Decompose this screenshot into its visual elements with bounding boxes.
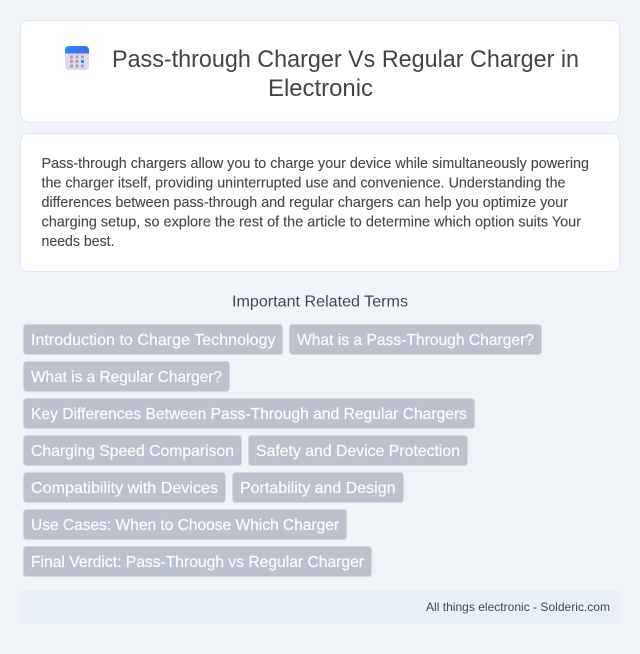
tag: what is a regular charger — [24, 362, 230, 392]
text block: introduction: the charger itself, providing uninterrupted use and convenience. Understanding the — [42, 176, 566, 192]
tag: safety and device protection: Safety and Device Protection — [256, 443, 460, 460]
title — [112, 46, 579, 102]
tag: what is a pass-through charger: What is a Pass-Through Charger? — [297, 332, 534, 349]
title: Electronic — [268, 75, 373, 102]
tag: compatibility with devices: Compatibility with Devices — [31, 480, 218, 497]
panel: title card — [20, 20, 620, 122]
tag: portability and design: Portability and Design — [240, 480, 396, 497]
tag: use cases — [24, 510, 346, 540]
tag: what is a pass-through charger — [290, 324, 542, 354]
text block: introduction: differences between pass-through and regular chargers can help you optimize your — [42, 195, 568, 211]
tag: charging speed comparison — [24, 436, 242, 466]
footer bar — [20, 590, 620, 624]
tag: key differences: Key Differences Between Pass-Through and Regular Chargers — [31, 406, 467, 423]
text block: introduction: needs best. — [42, 234, 114, 250]
text block: introduction: charging setup, so explore the rest of the article to determine which option suits Your — [42, 214, 581, 230]
tag: introduction to charge technology: Introduction to Charge Technology — [31, 332, 276, 349]
heading: important related terms: Important Related Terms — [232, 294, 408, 310]
tag: key differences — [24, 398, 474, 428]
tag list — [24, 324, 542, 576]
tag: what is a regular charger: What is a Regular Charger? — [31, 369, 222, 386]
panel: introduction — [20, 134, 620, 272]
text block: introduction: Pass-through chargers allow you to charge your device while simultaneously powering — [42, 156, 589, 172]
text block: introduction — [42, 156, 589, 250]
tag: use cases: Use Cases: When to Choose Which Charger — [31, 517, 340, 534]
tag: charging speed comparison: Charging Speed Comparison — [31, 443, 234, 460]
tag: portability and design — [232, 472, 404, 502]
icon: calendar — [65, 46, 89, 70]
tag: safety and device protection — [248, 436, 468, 466]
tag: introduction to charge technology — [24, 324, 282, 354]
tag: final verdict — [24, 546, 372, 576]
footer text: All things electronic - Solderic.com — [426, 600, 610, 614]
title: Pass-through Charger Vs Regular Charger in — [112, 46, 579, 73]
tag: final verdict: Final Verdict: Pass-Through vs Regular Charger — [31, 554, 365, 571]
tag: compatibility with devices — [24, 472, 226, 502]
